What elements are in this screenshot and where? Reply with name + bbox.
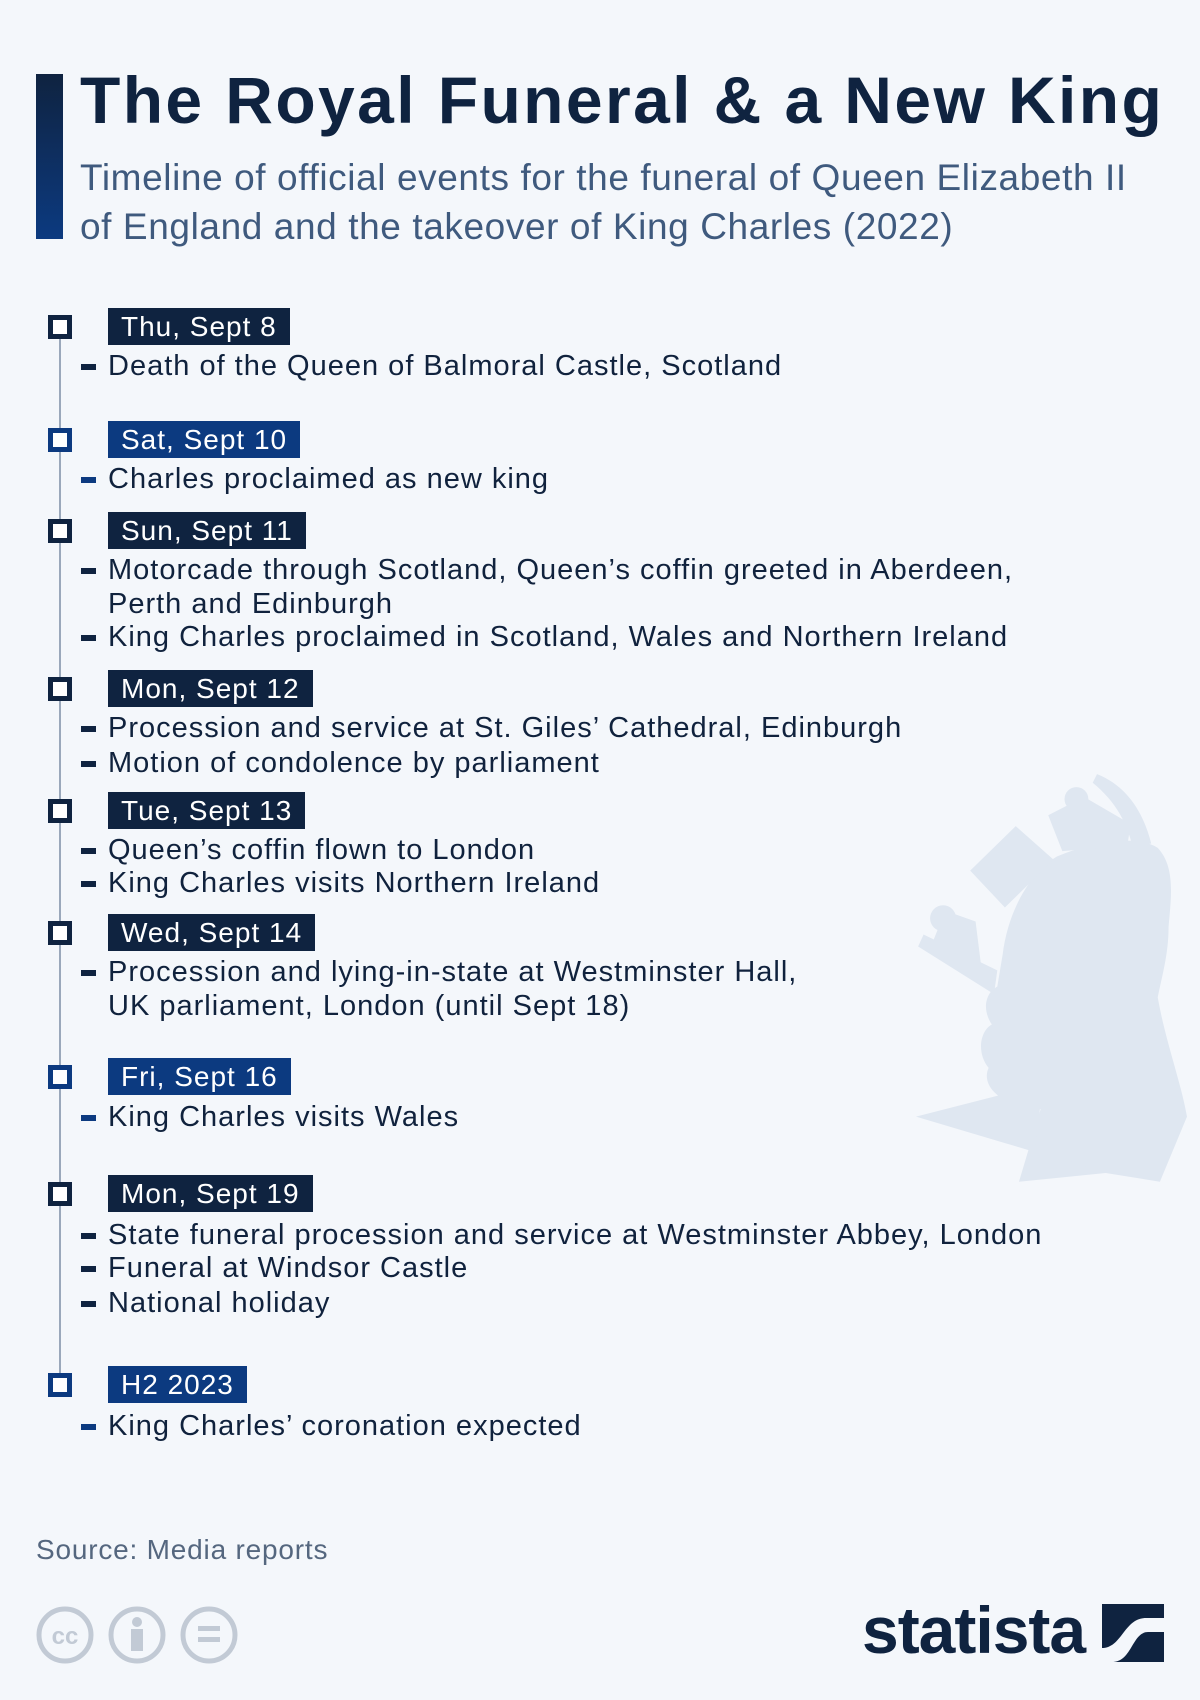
statista logo: statista xyxy=(862,1593,1085,1667)
event: Sept 14: Procession and lying-in-state at Westminster Hall, xyxy=(108,956,797,988)
title: The Royal Funeral & a New King xyxy=(80,63,1164,137)
event: Sept 8 xyxy=(48,308,782,382)
subtitle: of England and the takeover of King Charles (2022) xyxy=(80,206,953,247)
event: Sept 19 xyxy=(48,1175,1042,1319)
event: Sept 19: Funeral at Windsor Castle xyxy=(108,1252,468,1284)
event: Sept 19: Mon, Sept 19 xyxy=(121,1178,300,1209)
event: Sept 16: King Charles visits Wales xyxy=(108,1101,459,1133)
event: Sept 12: Mon, Sept 12 xyxy=(121,673,300,704)
event: Sept 12: Procession and service at St. Giles’ Cathedral, Edinburgh xyxy=(108,712,902,744)
event: Sept 11: Perth and Edinburgh xyxy=(108,588,393,620)
event: Sept 19: National holiday xyxy=(108,1287,330,1319)
event: Sept 8: Thu, Sept 8 xyxy=(121,311,277,342)
source: Source: Media reports xyxy=(36,1534,328,1565)
event: H2 2023: H2 2023 xyxy=(121,1369,234,1400)
event: Sept 19: State funeral procession and service at Westminster Abbey, London xyxy=(108,1219,1042,1251)
subtitle xyxy=(80,157,1127,247)
event: Sept 16 xyxy=(48,1058,459,1133)
event: Sept 13: Queen’s coffin flown to London xyxy=(108,834,535,866)
subtitle: Timeline of official events for the funeral of Queen Elizabeth II xyxy=(80,157,1127,198)
event: Sept 14: UK parliament, London (until Sept 18) xyxy=(108,990,630,1022)
event: Sept 13: King Charles visits Northern Ireland xyxy=(108,867,600,899)
event: Sept 10: Sat, Sept 10 xyxy=(121,424,287,455)
timeline xyxy=(59,339,61,1373)
event: Sept 10: Charles proclaimed as new king xyxy=(108,463,549,495)
event: Sept 13 xyxy=(48,792,600,899)
event: Sept 8: Death of the Queen of Balmoral Castle, Scotland xyxy=(108,350,782,382)
event: Sept 11: King Charles proclaimed in Scotland, Wales and Northern Ireland xyxy=(108,621,1008,653)
event: Sept 11 xyxy=(48,512,1013,653)
event: Sept 10 xyxy=(48,421,549,495)
accent bar xyxy=(36,74,63,239)
event: Sept 12 xyxy=(48,670,902,779)
event: Sept 16: Fri, Sept 16 xyxy=(121,1061,278,1092)
event: H2 2023: King Charles’ coronation expected xyxy=(108,1410,582,1442)
event: Sept 12: Motion of condolence by parliament xyxy=(108,747,600,779)
event: H2 2023 xyxy=(48,1366,582,1442)
event: Sept 14 xyxy=(48,914,797,1022)
event: Sept 14: Wed, Sept 14 xyxy=(121,917,302,948)
title block xyxy=(36,63,1164,247)
event: Sept 13: Tue, Sept 13 xyxy=(121,795,292,826)
license icons: cc xyxy=(52,1623,78,1650)
license icons xyxy=(36,1606,238,1664)
event: Sept 11: Sun, Sept 11 xyxy=(121,515,293,546)
event: Sept 11: Motorcade through Scotland, Queen’s coffin greeted in Aberdeen, xyxy=(108,554,1013,586)
